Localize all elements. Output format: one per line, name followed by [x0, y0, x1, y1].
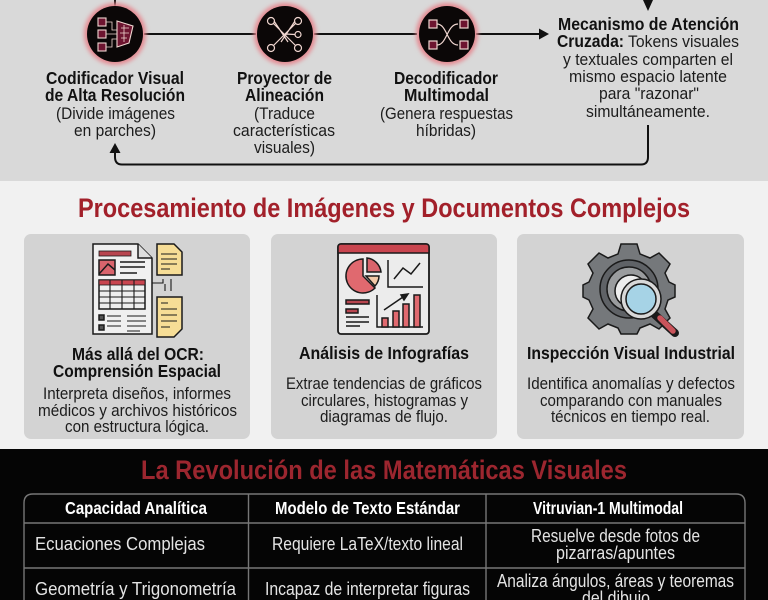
row: complex equations: [35, 526, 700, 563]
table header: [65, 498, 683, 518]
text: multimodal decoder: (Genera respuestas: [380, 104, 513, 123]
text: infographic analysis: circulares, histogramas y: [301, 391, 468, 410]
text: cross attention mechanism: y textuales comparten el: [563, 50, 733, 69]
row: complex equations: pizarras/apuntes: [556, 543, 675, 563]
text: cross attention mechanism: Cruzada:: [557, 31, 624, 51]
text: alignment projector: Alineación: [245, 85, 324, 105]
text: cross attention mechanism: [557, 14, 739, 121]
text: cross attention mechanism: para "razonar": [599, 84, 699, 103]
icon: gear with magnifier: [583, 244, 675, 334]
icon: visual encoder: [84, 3, 146, 65]
text: industrial inspection: Identifica anomalías y defectos: [527, 374, 735, 393]
comparison table: [24, 494, 745, 600]
text: beyond OCR: con estructura lógica.: [65, 417, 209, 436]
text: visual encoder: de Alta Resolución: [45, 85, 185, 105]
text: multimodal decoder: híbridas): [416, 121, 476, 140]
arrow: to attention mechanism: [539, 28, 549, 40]
text: infographic analysis: diagramas de flujo.: [320, 407, 448, 426]
table header: Vitruvian-1 Multimodal: [533, 498, 683, 518]
text: multimodal decoder: Decodificador: [394, 68, 498, 88]
row: geometry and trigonometry: Incapaz de interpretar figuras: [265, 579, 470, 599]
icon: charts window: [338, 244, 429, 334]
icon: document analysis: [93, 244, 182, 337]
text: industrial inspection: [527, 343, 735, 426]
text: cross attention mechanism: simultáneamente.: [586, 102, 710, 121]
text: beyond OCR: Comprensión Espacial: [53, 361, 221, 381]
text: visual encoder: [45, 68, 185, 140]
card: industrial inspection: [517, 234, 744, 439]
table header: Modelo de Texto Estándar: [275, 498, 460, 518]
row: geometry and trigonometry: Analiza ángulos, áreas y teoremas: [497, 571, 734, 591]
arrow: feedback loop: [110, 125, 648, 164]
text: multimodal decoder: Multimodal: [404, 85, 489, 105]
text: beyond OCR: [38, 344, 237, 436]
row: geometry and trigonometry: [35, 571, 734, 600]
text: infographic analysis: [286, 343, 482, 426]
row: complex equations: Resuelve desde fotos de: [531, 526, 700, 546]
text: beyond OCR: Más allá del OCR:: [72, 344, 204, 364]
card: infographic analysis: [271, 234, 497, 439]
connector lines: [115, 0, 540, 34]
icon: alignment projector: [254, 3, 316, 65]
text: beyond OCR: Interpreta diseños, informes: [43, 384, 231, 403]
text: industrial inspection: comparando con manuales: [540, 391, 722, 410]
text: alignment projector: (Traduce: [254, 104, 315, 123]
text: beyond OCR: médicos y archivos históricos: [38, 401, 237, 420]
text: cross attention mechanism: mismo espacio latente: [569, 67, 727, 86]
table header: Capacidad Analítica: [65, 498, 207, 518]
text: alignment projector: características: [233, 121, 335, 140]
text: visual encoder: en parches): [74, 121, 156, 140]
panel: architecture flow: [0, 0, 768, 181]
heading: visual mathematics: La Revolución de las Matemáticas Visuales: [141, 455, 627, 485]
text: alignment projector: [233, 68, 335, 157]
text: alignment projector: visuales): [254, 138, 315, 157]
row: complex equations: Requiere LaTeX/texto lineal: [272, 534, 463, 554]
text: multimodal decoder: [380, 68, 513, 140]
row: geometry and trigonometry: Geometría y Trigonometría: [35, 579, 237, 599]
text: alignment projector: Proyector de: [237, 68, 332, 88]
text: industrial inspection: Inspección Visual Industrial: [527, 343, 735, 363]
text: cross attention mechanism: Mecanismo de Atención: [558, 14, 739, 34]
text: visual encoder: (Divide imágenes: [56, 104, 175, 123]
text: cross attention mechanism: Tokens visuales: [628, 32, 739, 51]
card: beyond OCR: [24, 234, 250, 439]
text: infographic analysis: Análisis de Infografías: [299, 343, 469, 363]
icon: multimodal decoder: [416, 3, 478, 65]
text: industrial inspection: técnicos en tiempo real.: [551, 407, 710, 426]
text: visual encoder: Codificador Visual: [46, 68, 184, 88]
panel: visual mathematics: [0, 449, 768, 600]
panel: image and document processing: [0, 181, 768, 449]
text: infographic analysis: Extrae tendencias de gráficos: [286, 374, 482, 393]
row: complex equations: Ecuaciones Complejas: [35, 534, 205, 554]
arrow: from above: [643, 0, 653, 11]
heading: image processing: Procesamiento de Imágenes y Documentos Complejos: [78, 193, 690, 223]
